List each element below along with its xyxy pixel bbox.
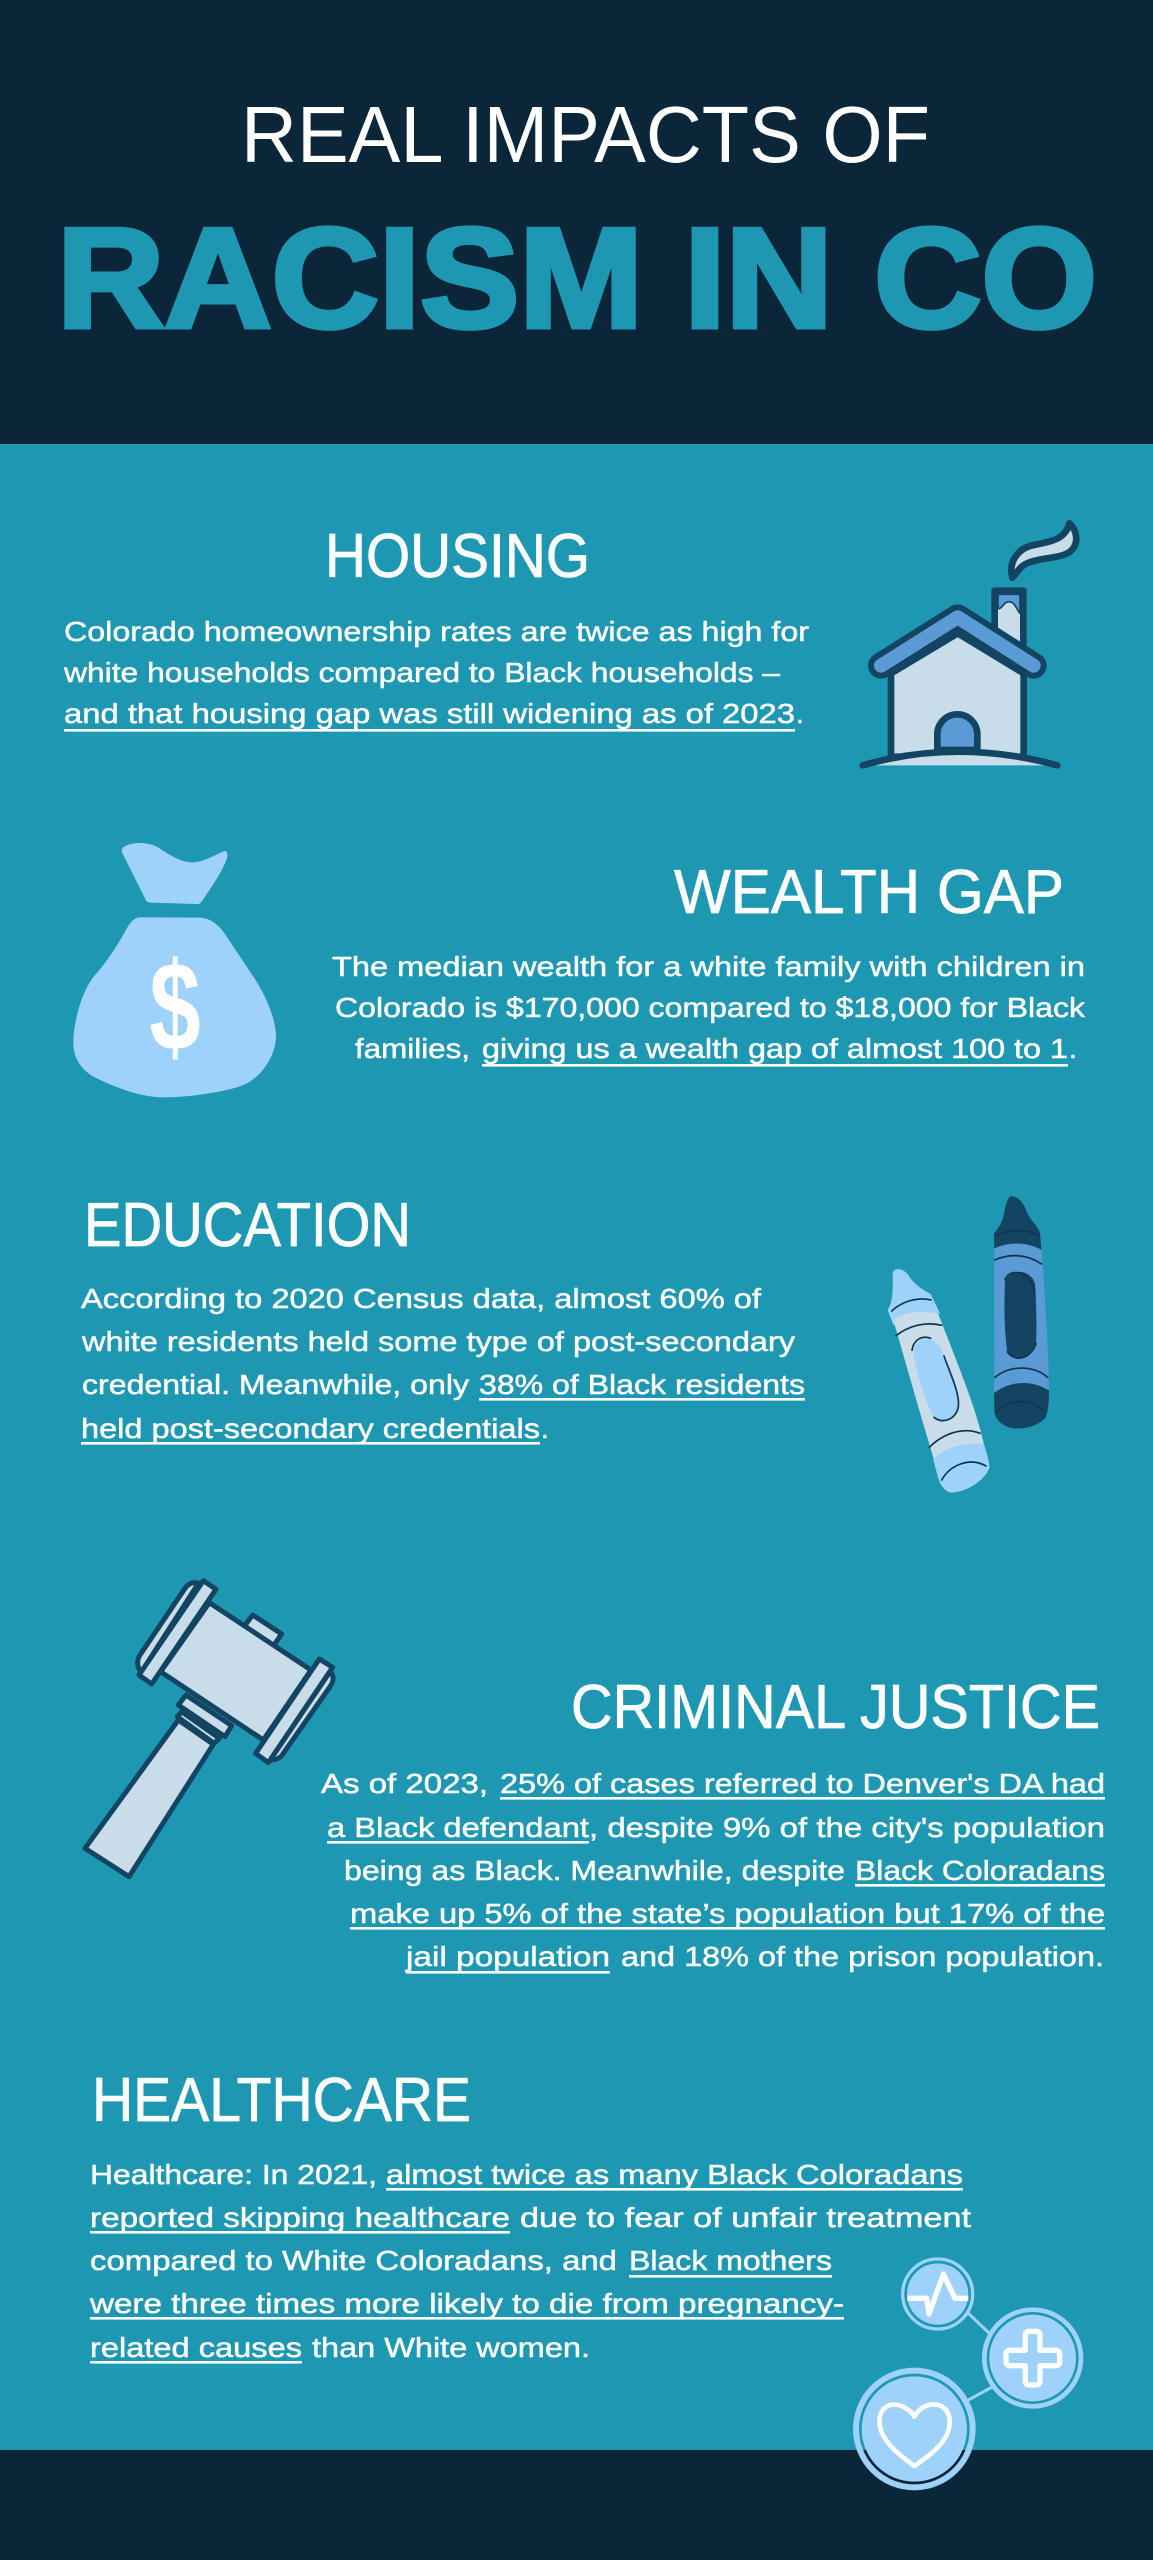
text block: criminal justice: make up 5% of the state’s population but 17% of the bbox=[350, 1898, 1105, 1929]
icon part: dollar sign: $ bbox=[149, 937, 201, 1077]
text block: criminal justice: As of 2023, bbox=[321, 1768, 488, 1799]
title: racism in CO: RACISM IN CO bbox=[57, 199, 1097, 358]
heading: healthcare: HEALTHCARE bbox=[92, 2066, 471, 2135]
text block: healthcare: almost twice as many Black Coloradans bbox=[386, 2159, 963, 2190]
text block: education: 38% of Black residents bbox=[479, 1369, 805, 1400]
panel: criminal justice bbox=[85, 1581, 1105, 1974]
panel: education bbox=[81, 1191, 1049, 1493]
icon part: collar bbox=[177, 1695, 232, 1743]
text block: criminal justice: jail population bbox=[405, 1941, 610, 1972]
icon: house bbox=[863, 523, 1076, 765]
text block: housing: Colorado homeownership rates are twice as high for bbox=[64, 616, 809, 647]
panel: housing bbox=[63, 522, 1076, 765]
text block: criminal justice: being as Black. Meanwhile, despite bbox=[344, 1855, 845, 1886]
title: real impacts of: REAL IMPACTS OF bbox=[241, 90, 930, 179]
text block: criminal justice: , despite 9% of the city's population bbox=[589, 1812, 1105, 1843]
icon part: pulse circle bbox=[903, 2259, 973, 2329]
icon part: heart circle bbox=[856, 2371, 973, 2487]
text block: criminal justice: a Black defendant bbox=[327, 1812, 589, 1843]
text block: housing: and that housing gap was still widening as of 2023 bbox=[64, 698, 795, 729]
text block: healthcare: Healthcare: In 2021, bbox=[90, 2159, 377, 2190]
icon part: top nub bbox=[244, 1615, 282, 1646]
text block: healthcare: compared to White Coloradans, and bbox=[90, 2245, 617, 2276]
icon part: handle bbox=[85, 1720, 213, 1877]
icon part: light crayon bbox=[888, 1269, 989, 1493]
text block: criminal justice bbox=[321, 1768, 1105, 1974]
panel: healthcare bbox=[89, 2066, 1081, 2487]
icon part: left face bbox=[138, 1581, 216, 1684]
text block: wealth gap: giving us a wealth gap of almost 100 to 1 bbox=[482, 1033, 1068, 1064]
icon part: head bbox=[161, 1603, 311, 1740]
text block: criminal justice: 25% of cases referred to Denver's DA had bbox=[500, 1768, 1105, 1799]
text block: wealth gap: Colorado is $170,000 compared to $18,000 for Black bbox=[335, 992, 1086, 1023]
text block: education: held post-secondary credentials bbox=[81, 1413, 540, 1444]
header band bbox=[0, 0, 1153, 444]
icon part: chimney bbox=[995, 591, 1023, 647]
text block: healthcare: reported skipping healthcare bbox=[90, 2202, 510, 2233]
text block: education: According to 2020 Census data, almost 60% of bbox=[81, 1283, 761, 1314]
text block: criminal justice: and 18% of the prison population. bbox=[621, 1941, 1104, 1972]
icon: gavel bbox=[85, 1581, 333, 1877]
text block: housing bbox=[63, 616, 809, 732]
text block: wealth gap: . bbox=[1069, 1033, 1077, 1064]
icon part: ground bbox=[863, 752, 1057, 765]
icon part: dark crayon bbox=[994, 1196, 1049, 1429]
text block: education: . bbox=[541, 1413, 549, 1444]
heading: housing: HOUSING bbox=[325, 522, 590, 591]
icon part: right face bbox=[256, 1659, 333, 1763]
icon part: bag neck bbox=[122, 843, 227, 904]
text block: education: credential. Meanwhile, only bbox=[82, 1369, 469, 1400]
text block: housing: white households compared to Black households – bbox=[63, 657, 780, 688]
icon part: connectors bbox=[968, 2313, 992, 2400]
icon part: bag body bbox=[73, 917, 276, 1097]
text block: wealth gap: families, bbox=[355, 1033, 470, 1064]
text block: wealth gap bbox=[332, 951, 1086, 1067]
icon part: walls bbox=[891, 633, 1024, 757]
panel: wealth gap bbox=[73, 843, 1086, 1097]
text block: healthcare: were three times more likely to die from pregnancy- bbox=[89, 2288, 844, 2319]
text block: healthcare: Black mothers bbox=[629, 2245, 832, 2276]
text block: healthcare: than White women. bbox=[312, 2332, 590, 2363]
icon: money bag bbox=[73, 843, 276, 1097]
icon part: roof bbox=[881, 617, 1034, 666]
text block: healthcare bbox=[89, 2159, 971, 2364]
icon part: cross circle bbox=[984, 2310, 1081, 2406]
icon: crayons bbox=[888, 1196, 1049, 1493]
text block: housing: . bbox=[796, 698, 804, 729]
icon part: door bbox=[937, 714, 977, 750]
text block: healthcare: related causes bbox=[90, 2332, 302, 2363]
heading: education: EDUCATION bbox=[84, 1191, 411, 1260]
text block: criminal justice: Black Coloradans bbox=[855, 1855, 1105, 1886]
heading: criminal justice: CRIMINAL JUSTICE bbox=[571, 1673, 1100, 1742]
icon part: smoke bbox=[1011, 523, 1076, 578]
text block: education: white residents held some type of post-secondary bbox=[81, 1326, 795, 1357]
text block: healthcare: due to fear of unfair treatment bbox=[520, 2202, 971, 2233]
text block: wealth gap: The median wealth for a white family with children in bbox=[332, 951, 1085, 982]
footer band bbox=[0, 2450, 1153, 2560]
heading: wealth gap: WEALTH GAP bbox=[674, 858, 1064, 927]
icon: health network bbox=[856, 2259, 1081, 2487]
text block: education bbox=[81, 1283, 805, 1445]
